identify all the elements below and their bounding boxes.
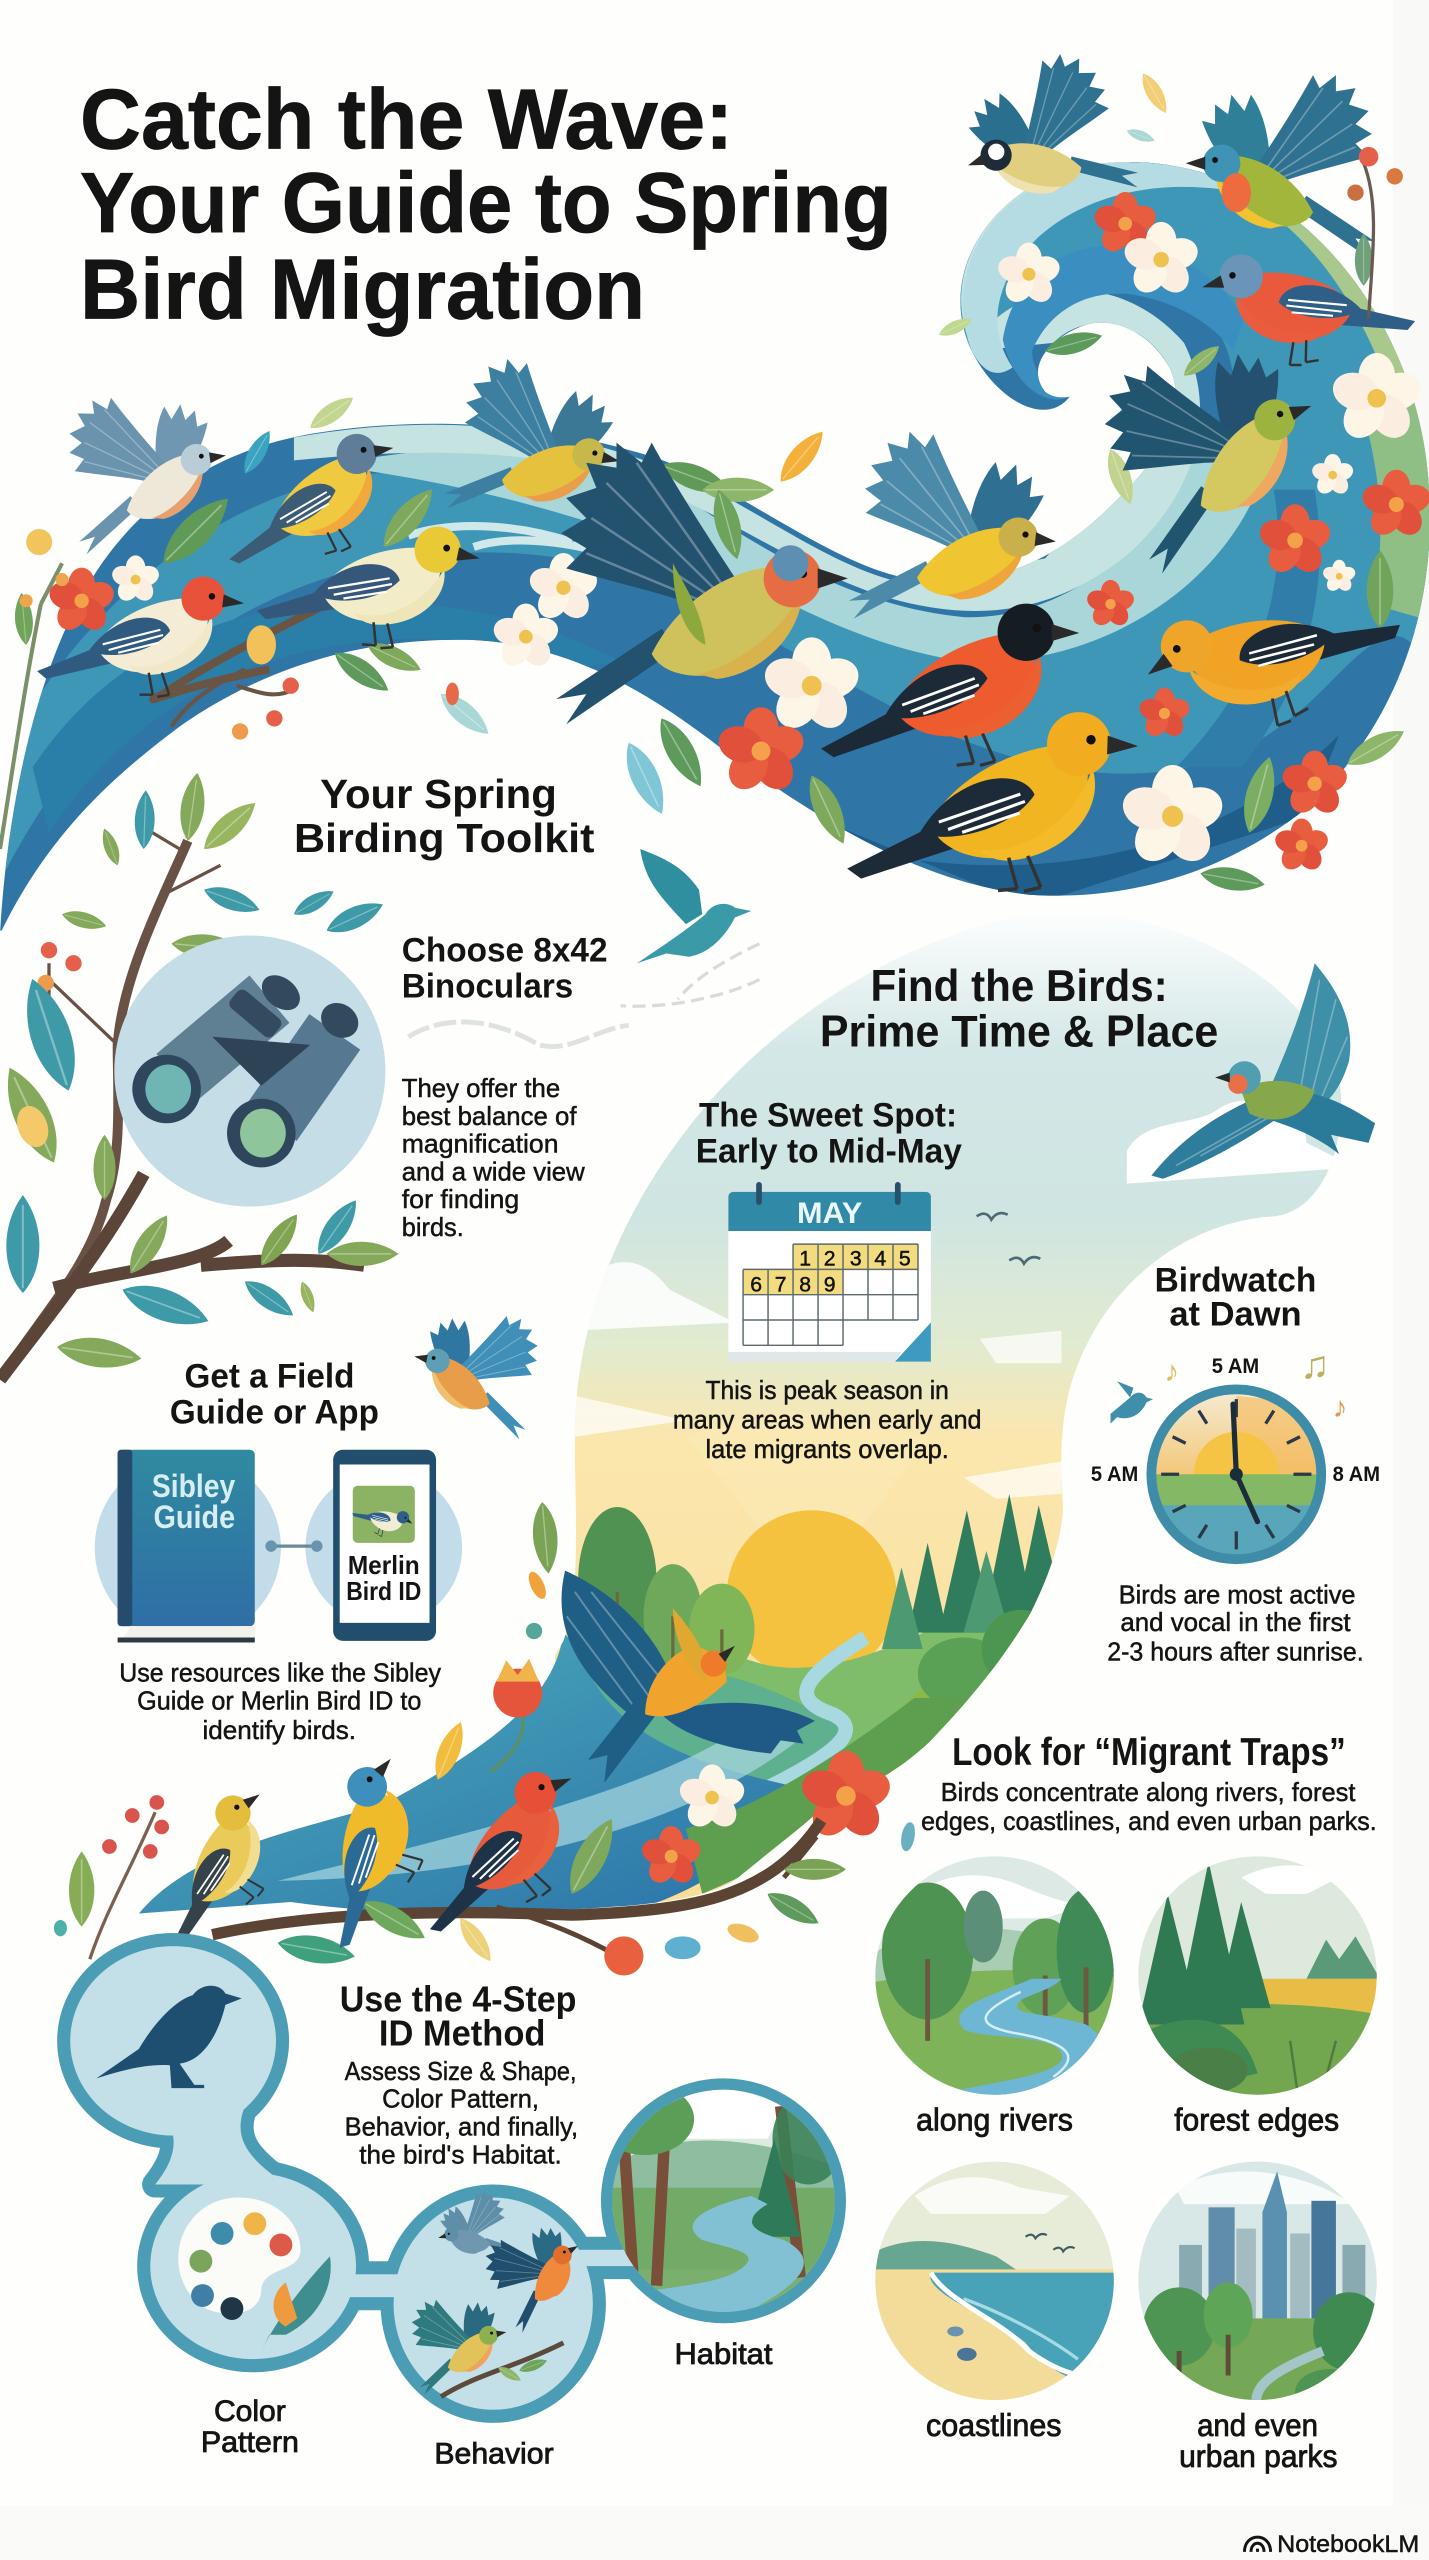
wave flowers and leaves <box>46 192 1429 896</box>
landscape hills and trees <box>578 1494 1052 1784</box>
migrant traps body text <box>921 1777 1377 1836</box>
scene: urban parks <box>1138 2162 1377 2400</box>
habitat labels: along rivers <box>916 2103 1073 2138</box>
binoculars body text: for finding <box>402 1184 519 1214</box>
dawn body text: Birds are most active <box>1119 1579 1356 1609</box>
dawn heading: Birdwatch <box>1155 1261 1316 1299</box>
calendar icon: 9 <box>824 1273 836 1296</box>
title <box>80 72 892 336</box>
small birds in panel <box>977 1213 1040 1264</box>
step: size and shape bird <box>96 1986 242 2088</box>
field guide body text: identify birds. <box>203 1715 356 1745</box>
binoculars body text: birds. <box>402 1212 464 1242</box>
bird: large green flying right side <box>1151 963 1375 1179</box>
binoculars body text <box>402 1073 585 1242</box>
music notes and small bird: ♫ <box>1300 1344 1329 1387</box>
bird: pale flying <box>60 383 237 555</box>
footer: NotebookLM logo: NotebookLM <box>1277 2531 1419 2558</box>
migrant traps heading: Look for “Migrant Traps” <box>952 1731 1346 1774</box>
four-step body text: Assess Size & Shape, <box>345 2056 576 2086</box>
scene: along rivers <box>875 1856 1114 2095</box>
bird: yellow flying centre <box>847 427 1066 640</box>
bird: yellow-headed perched <box>255 494 484 664</box>
binoculars heading: Binoculars <box>402 968 573 1006</box>
panel: find the birds background <box>139 936 1342 1914</box>
binoculars body text: and a wide view <box>402 1156 585 1186</box>
lower swoosh water <box>139 1633 800 1913</box>
title: Bird Migration <box>80 241 645 336</box>
bird: small flying <box>403 1300 546 1440</box>
wave band with birds and flowers <box>0 43 1429 931</box>
four-step body text <box>345 2056 578 2169</box>
field guide heading: Guide or App <box>170 1394 379 1432</box>
toolkit heading: Birding Toolkit <box>294 815 595 861</box>
step: color palette <box>178 2198 331 2351</box>
step: behavior birds <box>405 2187 602 2397</box>
book <box>118 1450 255 1642</box>
calendar icon: 6 <box>750 1273 762 1296</box>
scene: coastlines <box>875 2162 1114 2400</box>
bird: orange oriole <box>1133 517 1408 773</box>
chain outline <box>70 1946 833 2410</box>
four-step body text: the bird's Habitat. <box>359 2139 562 2169</box>
phone: Merlin <box>348 1550 420 1580</box>
clock time labels: 5 AM <box>1091 1463 1138 1486</box>
find the birds heading <box>820 962 1218 1057</box>
left branch with leaves <box>0 771 398 1380</box>
sweet spot body text: many areas when early and <box>673 1405 982 1435</box>
binoculars heading <box>402 932 608 1006</box>
clock time labels: 8 AM <box>1333 1463 1380 1486</box>
habitat labels: forest edges <box>1174 2103 1339 2138</box>
sweet spot body text <box>673 1375 982 1464</box>
sweet spot heading: The Sweet Spot: <box>699 1097 957 1135</box>
bird: chickadee <box>943 43 1143 239</box>
toolkit heading: Your Spring <box>320 771 557 817</box>
calendar icon: 8 <box>799 1273 811 1296</box>
step labels <box>201 2338 772 2471</box>
bottom margin strip <box>0 2506 1429 2560</box>
dawn heading <box>1155 1261 1316 1334</box>
find the birds heading: Find the Birds: <box>870 962 1168 1011</box>
habitat labels: coastlines <box>926 2408 1062 2443</box>
bird: yellow warbler perched <box>213 428 408 569</box>
field guide heading <box>170 1358 379 1432</box>
sweet spot heading <box>696 1097 962 1170</box>
habitat labels: and even <box>1197 2408 1318 2443</box>
four-step heading <box>340 1978 576 2054</box>
find the birds heading: Prime Time & Place <box>820 1008 1218 1057</box>
step: habitat scene <box>612 2090 835 2312</box>
binoculars icon <box>114 936 385 1207</box>
field guide body text <box>119 1658 441 1745</box>
bird: flying orange over swoosh <box>562 1571 815 1783</box>
step labels: Habitat <box>674 2338 772 2371</box>
book: Guide <box>154 1498 235 1535</box>
leaf and flowers by the swoosh <box>428 1501 917 1901</box>
clock time labels: 5 AM <box>1212 1355 1259 1378</box>
migrant traps body text: edges, coastlines, and even urban parks. <box>921 1806 1377 1836</box>
calendar icon: 3 <box>850 1247 862 1270</box>
migrant traps body text: Birds concentrate along rivers, forest <box>941 1777 1356 1807</box>
step labels: Behavior <box>434 2438 554 2471</box>
dawn body text: 2-3 hours after sunrise. <box>1107 1636 1364 1666</box>
four-step heading: ID Method <box>379 2013 545 2054</box>
binoculars body text: best balance of <box>402 1101 577 1131</box>
book: Sibley <box>152 1467 235 1504</box>
bird: red-breasted perched <box>1196 213 1418 385</box>
music notes and small bird <box>1111 1344 1347 1424</box>
phone: Bird ID <box>346 1576 421 1606</box>
teal bird silhouette <box>621 849 759 1006</box>
sweet spot body text: late migrants overlap. <box>706 1434 949 1464</box>
clock icon <box>1143 1388 1331 1564</box>
music notes and small bird: ♪ <box>1164 1355 1179 1388</box>
calendar icon: 7 <box>775 1273 787 1296</box>
scene: forest edges <box>1138 1856 1377 2095</box>
right margin strip <box>1393 0 1429 2560</box>
bird: large flying <box>556 443 848 724</box>
music notes and small bird: ♪ <box>1333 1391 1347 1424</box>
sweet spot heading: Early to Mid-May <box>696 1132 962 1170</box>
calendar icon: 1 <box>799 1247 811 1270</box>
binoculars body text: They offer the <box>402 1073 560 1103</box>
four-step heading: Use the 4-Step <box>340 1978 576 2019</box>
title: Your Guide to Spring <box>80 155 892 250</box>
title: Catch the Wave: <box>80 72 733 167</box>
phone <box>333 1450 436 1641</box>
bird: red-headed perched <box>36 558 247 706</box>
calendar icon: 2 <box>824 1247 836 1270</box>
bird: black-headed oriole <box>821 601 1080 767</box>
binoculars body text: magnification <box>402 1129 559 1159</box>
step labels: Color <box>214 2395 286 2428</box>
four-step chain <box>70 1946 849 2410</box>
calendar icon: 4 <box>874 1247 886 1270</box>
motion swirl <box>408 1022 629 1047</box>
calendar icon: 5 <box>899 1247 911 1270</box>
four-step body text: Color Pattern, <box>382 2084 539 2114</box>
branch with three birds <box>54 1746 846 1976</box>
field guide body text: Guide or Merlin Bird ID to <box>137 1685 421 1715</box>
habitat labels <box>916 2103 1339 2474</box>
sun <box>728 1510 896 1668</box>
chain fill <box>70 1946 637 2410</box>
bird: yellow oriole <box>847 704 1139 895</box>
calendar icon: MAY <box>797 1197 863 1230</box>
floating leaves near the wave <box>238 70 1403 819</box>
toolkit heading <box>294 771 595 861</box>
field guide icons <box>95 1450 462 1642</box>
field guide body text: Use resources like the Sibley <box>119 1658 441 1688</box>
left twigs on the wave <box>0 529 69 849</box>
step labels: Pattern <box>201 2426 299 2459</box>
wave body <box>0 147 1429 931</box>
bird: yellow flying <box>441 352 635 542</box>
clock time labels <box>1091 1355 1380 1486</box>
bird: bluebird green <box>1186 75 1375 258</box>
four-step body text: Behavior, and finally, <box>345 2112 578 2142</box>
dawn heading: at Dawn <box>1169 1296 1302 1334</box>
dawn body text: and vocal in the first <box>1120 1607 1351 1637</box>
sweet spot body text: This is peak season in <box>706 1375 949 1405</box>
dawn body text <box>1107 1579 1364 1666</box>
habitat labels: urban parks <box>1179 2439 1338 2474</box>
field guide heading: Get a Field <box>185 1358 354 1396</box>
calendar icon <box>728 1182 931 1362</box>
bird: green flying <box>1084 316 1348 576</box>
binoculars heading: Choose 8x42 <box>402 932 608 970</box>
